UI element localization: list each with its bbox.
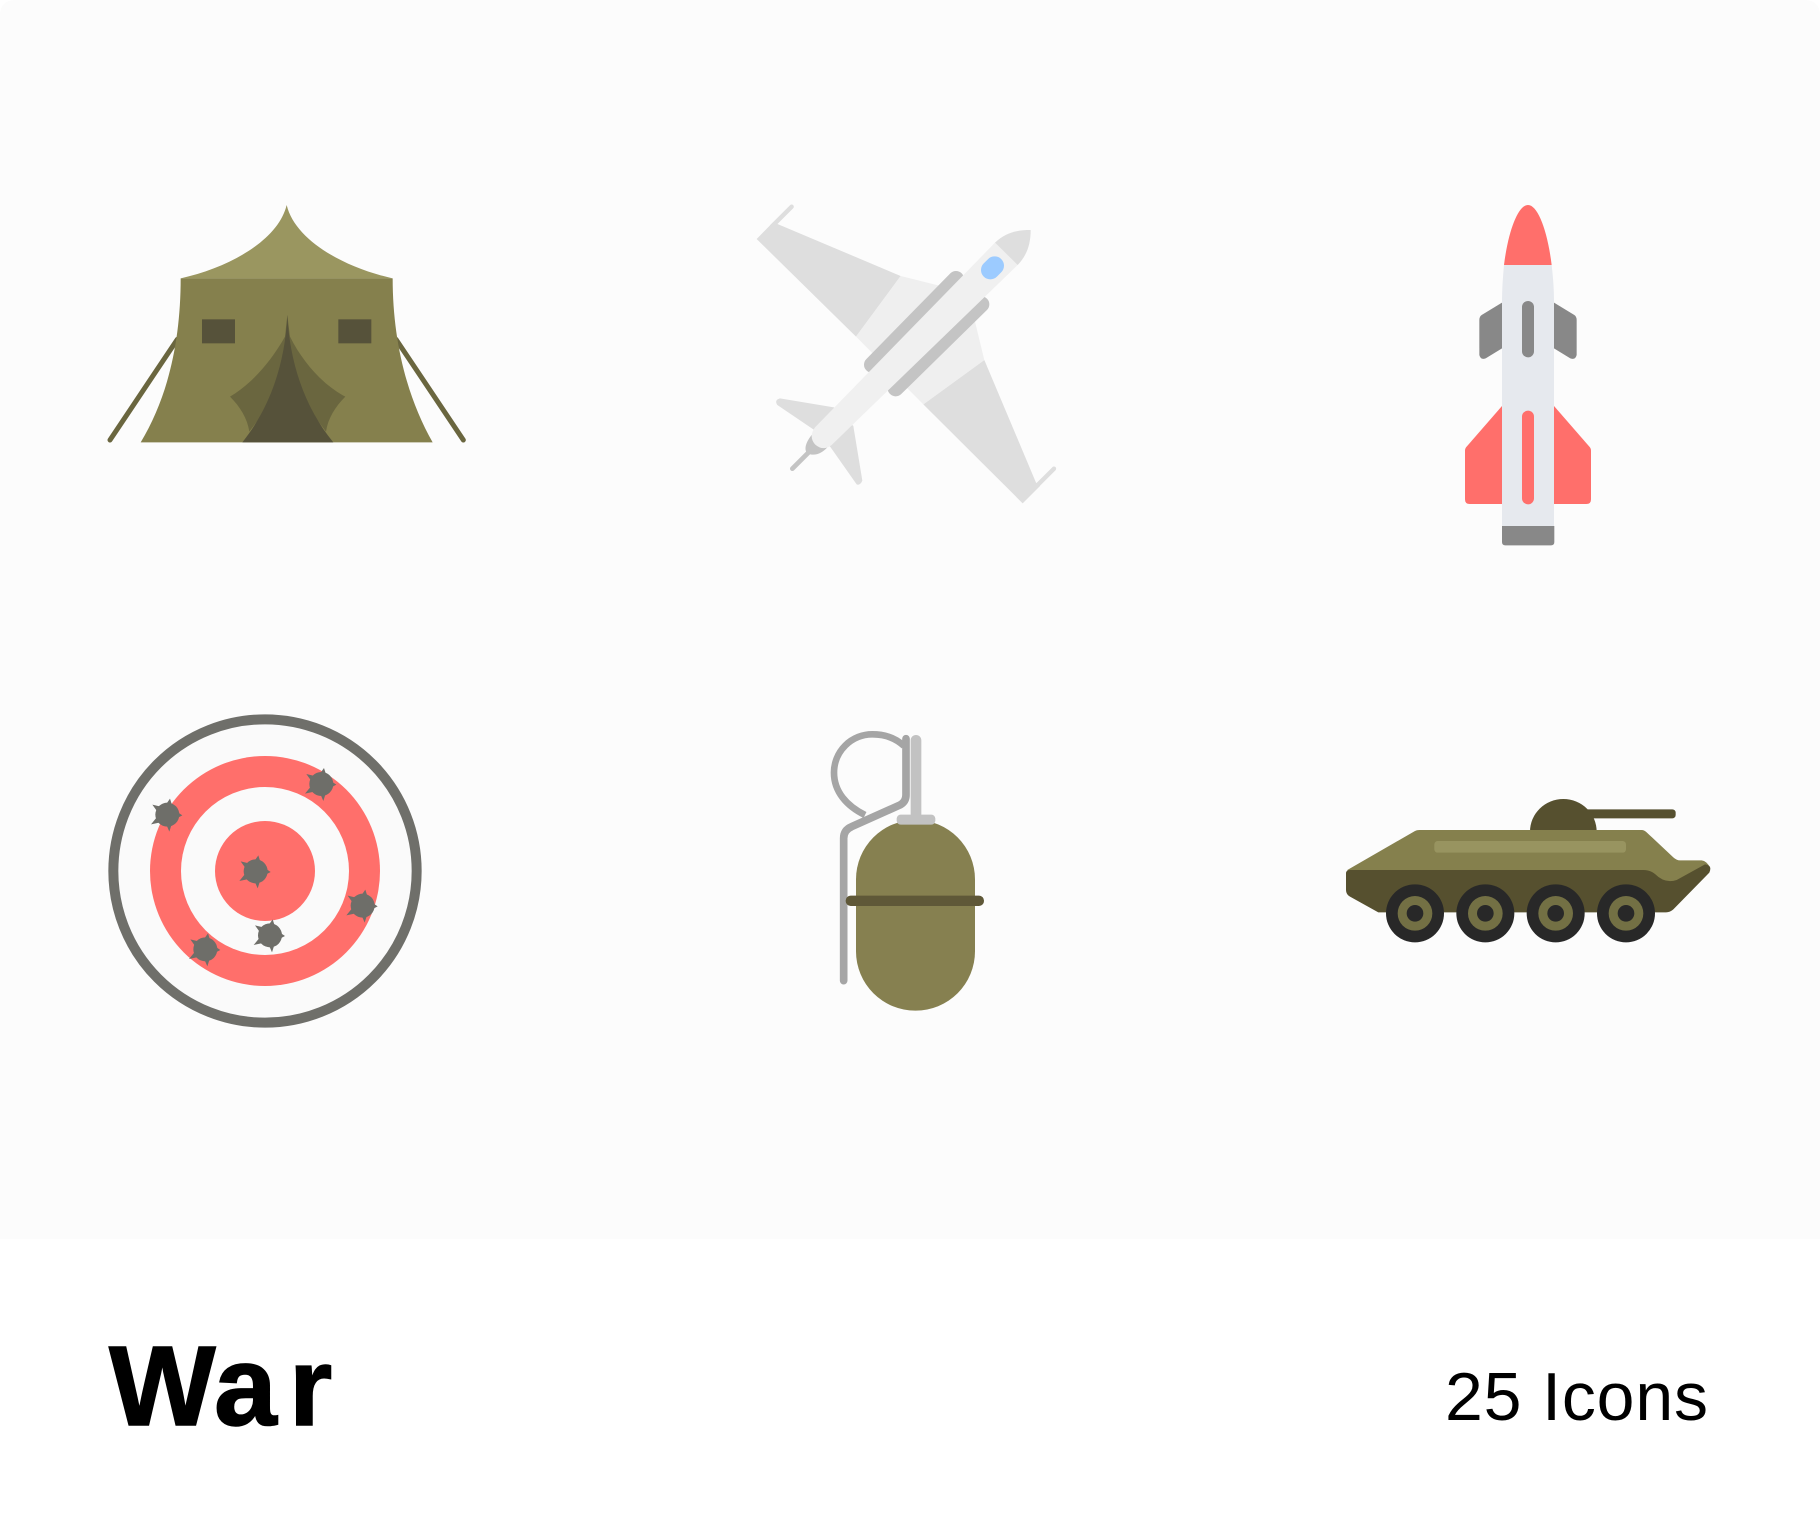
target rim xyxy=(113,719,417,1023)
turret xyxy=(1530,799,1597,832)
tent door opening xyxy=(242,315,333,442)
title: r xyxy=(289,1325,332,1449)
bullet hole 5 xyxy=(254,919,285,952)
grey slot xyxy=(1522,301,1534,357)
missile nose xyxy=(1504,205,1552,265)
outer wings xyxy=(757,222,901,337)
red slot xyxy=(1522,411,1534,504)
gun barrel xyxy=(1583,809,1676,818)
grenade stem xyxy=(911,735,921,820)
tail fins xyxy=(776,398,862,485)
title: W xyxy=(109,1323,216,1449)
bullet hole 3 xyxy=(239,855,271,888)
grey fins xyxy=(1479,303,1577,359)
tent roof xyxy=(181,205,393,278)
missile base xyxy=(1502,526,1554,545)
hull top xyxy=(1347,830,1710,887)
grenade body xyxy=(856,820,975,1011)
grenade cap xyxy=(897,815,935,825)
target white ring xyxy=(181,787,349,955)
icon: shooting target xyxy=(113,719,417,1023)
icon: fighter jet xyxy=(757,207,1054,503)
hull highlight xyxy=(1434,841,1626,853)
icon count: 25 Icons xyxy=(1445,1359,1708,1435)
hull lower xyxy=(1346,864,1710,912)
red fins xyxy=(1465,406,1591,504)
inner wings xyxy=(856,276,984,404)
tent ropes xyxy=(110,339,463,440)
icon: armored vehicle xyxy=(1346,799,1710,942)
tent door flaps xyxy=(230,315,345,432)
wheel 1 xyxy=(1386,884,1444,942)
tent windows xyxy=(202,319,371,343)
grenade pin ring xyxy=(834,734,904,815)
missile body xyxy=(1502,265,1554,526)
bullet hole 2 xyxy=(305,768,336,801)
icon: missile xyxy=(1465,205,1591,545)
icon: hand grenade xyxy=(834,734,984,1011)
icon: army tent xyxy=(110,205,463,442)
target bullseye xyxy=(215,821,315,921)
target red ring xyxy=(150,756,380,986)
bullet hole 1 xyxy=(151,799,182,832)
exhaust cone xyxy=(805,435,827,455)
nose cone xyxy=(995,230,1031,265)
bullet hole 6 xyxy=(189,933,220,966)
engines xyxy=(872,279,981,388)
cockpit xyxy=(990,266,995,270)
wheel 3 xyxy=(1527,884,1585,942)
fuselage xyxy=(812,243,1018,448)
bullet hole 4 xyxy=(346,890,378,923)
grenade band xyxy=(846,896,984,906)
wheel 2 xyxy=(1456,884,1514,942)
wheel 4 xyxy=(1597,884,1655,942)
grenade lever xyxy=(844,739,906,981)
tent body xyxy=(141,278,433,442)
title: a xyxy=(214,1323,278,1449)
wing tip fins xyxy=(772,207,1054,489)
